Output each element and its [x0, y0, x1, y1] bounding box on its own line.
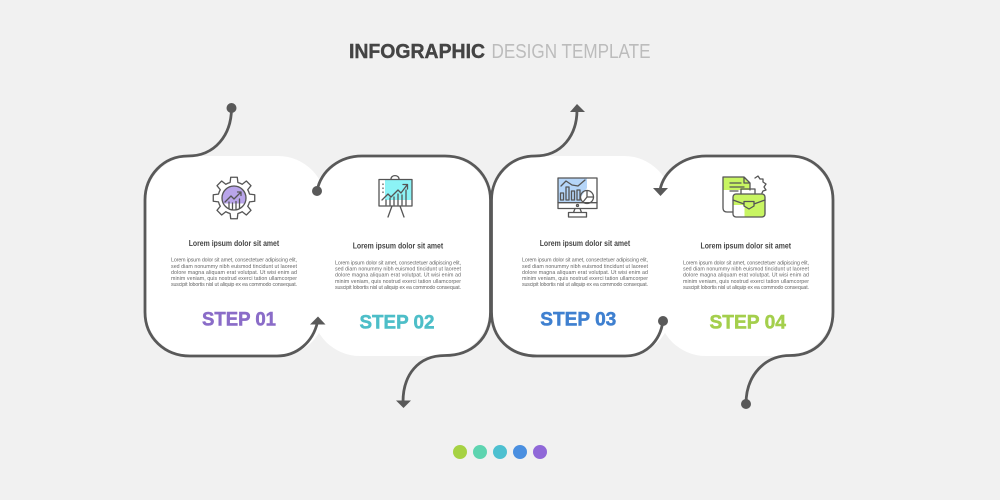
- text block: step 04: suscipit lobortis nisl ut aliquip ex ea commodo consequat.: [683, 285, 809, 291]
- text block: step 01: sed diam nonummy nibh euismod tincidunt ut laoreet: [171, 264, 298, 270]
- connector line: step 03: [492, 104, 668, 356]
- title: DESIGN TEMPLATE: [492, 41, 650, 63]
- text block: step 03: dolore magna aliquam erat volutpat. Ut wisi enim ad: [522, 270, 648, 276]
- text block: step 03: Lorem ipsum dolor sit amet, consectetuer adipiscing elit,: [522, 258, 648, 264]
- text block: step 01: dolore magna aliquam erat volutpat. Ut wisi enim ad: [171, 270, 297, 276]
- text block: step 01: suscipit lobortis nisl ut aliquip ex ea commodo consequat.: [171, 282, 297, 288]
- text block: step 01: Lorem ipsum dolor sit amet, consectetuer adipiscing elit,: [171, 258, 297, 264]
- connector line: step 02: [312, 156, 490, 408]
- text block: step 03: sed diam nonummy nibh euismod tincidunt ut laoreet: [522, 264, 649, 270]
- title: INFOGRAPHIC: [349, 41, 485, 63]
- text block: step 02: minim veniam, quis nostrud exerci tation ullamcorper: [335, 279, 461, 285]
- title: [349, 41, 650, 63]
- step label: 02: STEP 02: [360, 311, 434, 333]
- text block: step 02: [335, 260, 462, 291]
- heading: step 01: Lorem ipsum dolor sit amet: [189, 238, 279, 248]
- step label: 04: STEP 04: [709, 311, 786, 333]
- connector line: step 01: [145, 103, 326, 356]
- panel: step 03: [492, 104, 668, 356]
- colour dots: [453, 445, 547, 459]
- panel: card backgrounds: [145, 156, 833, 356]
- text block: step 04: dolore magna aliquam erat volutpat. Ut wisi enim ad: [683, 273, 809, 279]
- text block: step 04: minim veniam, quis nostrud exerci tation ullamcorper: [683, 279, 809, 285]
- heading: step 03: Lorem ipsum dolor sit amet: [540, 238, 630, 248]
- icon: gear with chart: [213, 177, 255, 219]
- panel: step 02: [312, 156, 490, 408]
- text block: step 02: suscipit lobortis nisl ut aliquip ex ea commodo consequat.: [335, 285, 461, 291]
- heading: step 04: Lorem ipsum dolor sit amet: [700, 240, 791, 250]
- icon: presentation board: [379, 176, 412, 217]
- step label: 03: STEP 03: [540, 308, 617, 330]
- heading: step 02: Lorem ipsum dolor sit amet: [353, 240, 443, 250]
- panel: step 01: [145, 103, 326, 356]
- text block: step 01: minim veniam, quis nostrud exerci tation ullamcorper: [171, 276, 297, 282]
- text block: step 01: [171, 258, 298, 288]
- text block: step 02: dolore magna aliquam erat volutpat. Ut wisi enim ad: [335, 273, 461, 279]
- step label: 01: STEP 01: [202, 308, 276, 330]
- panel: step 04: [653, 156, 833, 409]
- icon: documents and briefcase: [723, 176, 766, 217]
- connector line: step 04: [653, 156, 833, 409]
- text block: step 03: suscipit lobortis nisl ut aliquip ex ea commodo consequat.: [522, 282, 648, 288]
- text block: step 02: sed diam nonummy nibh euismod tincidunt ut laoreet: [335, 267, 462, 273]
- icon: monitor dashboard: [558, 178, 597, 217]
- text block: step 04: sed diam nonummy nibh euismod tincidunt ut laoreet: [683, 267, 810, 273]
- text block: step 03: minim veniam, quis nostrud exerci tation ullamcorper: [522, 276, 648, 282]
- text block: step 02: Lorem ipsum dolor sit amet, consectetuer adipiscing elit,: [335, 260, 461, 266]
- text block: step 04: [683, 260, 810, 291]
- text block: step 04: Lorem ipsum dolor sit amet, consectetuer adipiscing elit,: [683, 260, 809, 266]
- text block: step 03: [522, 258, 649, 288]
